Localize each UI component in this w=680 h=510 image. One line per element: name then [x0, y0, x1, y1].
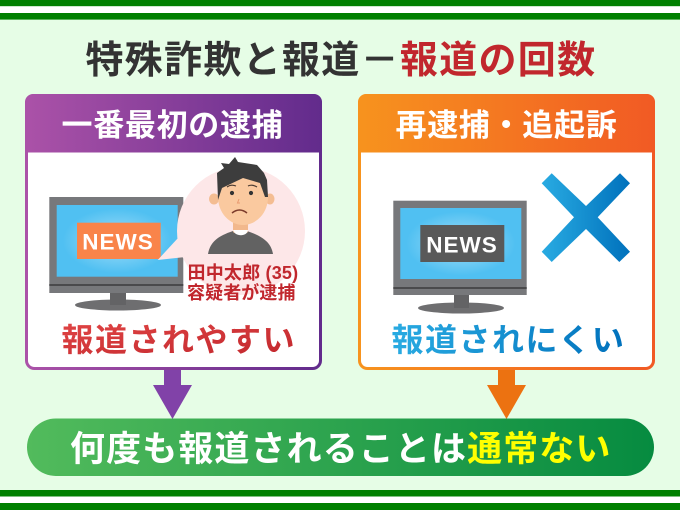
title: 特殊詐欺と報道－報道の回数	[86, 40, 596, 82]
banner pill	[27, 418, 654, 476]
top border stripes	[0, 0, 680, 20]
icon: worried man	[208, 157, 274, 254]
icon: news television: NEWS	[426, 233, 498, 258]
suspect caption	[187, 263, 298, 303]
panel frame	[360, 96, 654, 368]
icon: news television	[393, 201, 527, 314]
speech bubble with suspect	[158, 157, 305, 303]
icon: news television	[49, 197, 183, 310]
panel: re-arrest and additional indictment	[358, 94, 655, 368]
panel conclusion: 報道されにくい	[392, 322, 625, 358]
suspect caption: 田中太郎 (35)	[188, 263, 298, 283]
panel heading: 再逮捕・追起訴	[396, 108, 617, 143]
panel conclusion: 報道されやすい	[62, 322, 296, 358]
suspect caption: 容疑者が逮捕	[187, 282, 296, 303]
bottom border stripes	[0, 490, 680, 510]
bubble	[158, 167, 305, 295]
banner text: 何度も報道されることは通常ない	[70, 430, 612, 469]
panel heading: 一番最初の逮捕	[62, 108, 283, 143]
icon: news television: NEWS	[82, 229, 154, 254]
panel frame	[26, 96, 320, 368]
panel: first arrest	[25, 94, 322, 368]
icon: blue cross	[542, 173, 630, 262]
arrow: purple down	[153, 370, 192, 419]
panel header band	[358, 94, 655, 152]
arrow: orange down	[487, 370, 526, 419]
panel header band	[25, 94, 322, 152]
conclusion banner	[27, 418, 654, 476]
